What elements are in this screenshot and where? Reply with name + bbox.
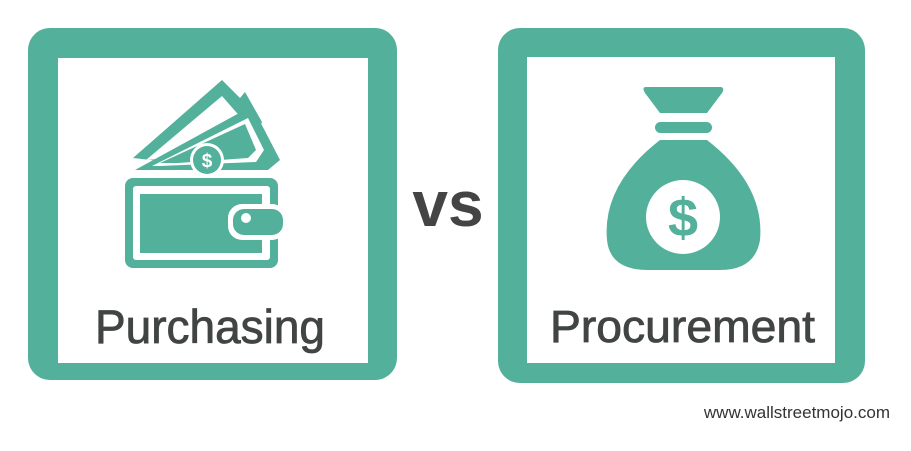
icon: money bag: $	[668, 188, 698, 248]
vs label: vs	[412, 168, 484, 240]
icon: wallet with bills: $	[202, 151, 213, 172]
heading: Procurement: Procurement	[550, 301, 816, 352]
panel: purchasing	[28, 28, 397, 380]
icon: money bag	[607, 87, 760, 270]
footer: website: www.wallstreetmojo.com	[703, 403, 890, 422]
panel: procurement	[498, 28, 865, 383]
icon: wallet with bills	[125, 80, 286, 268]
heading: Purchasing: Purchasing	[95, 300, 325, 353]
